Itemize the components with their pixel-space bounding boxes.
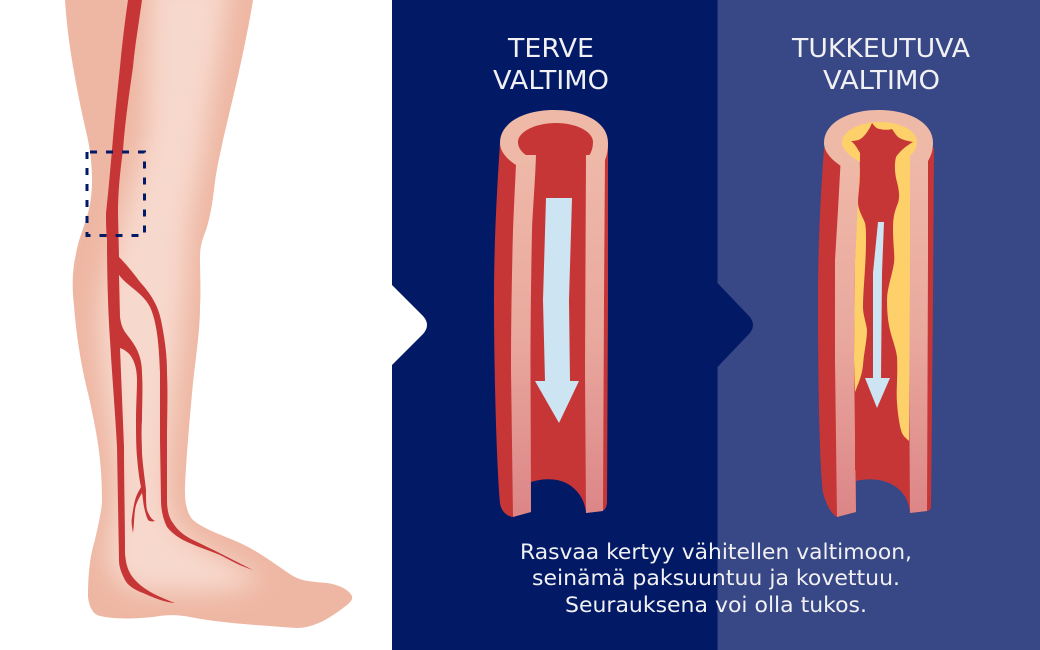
illustration: leg with arteries	[65, 0, 352, 628]
right front wall	[909, 150, 928, 513]
artery ring	[500, 110, 608, 165]
heading: healthy artery: VALTIMO	[493, 66, 609, 96]
arrow: navy chevron	[718, 283, 753, 367]
left front wall	[835, 155, 860, 517]
leg highlight	[100, 0, 262, 593]
heading: clogged artery: VALTIMO	[823, 66, 940, 96]
heading: clogged artery: TUKKEUTUVA	[791, 34, 970, 64]
flow arrow	[535, 198, 579, 423]
narrowed lumen	[851, 123, 913, 470]
illustration: clogged artery	[818, 110, 934, 517]
illustration: healthy artery	[494, 110, 608, 517]
outer artery wall	[494, 143, 608, 517]
text block: explanation	[520, 540, 912, 618]
panel: clogged artery background	[718, 0, 1040, 650]
artery network	[106, 0, 253, 603]
artery opening	[509, 118, 601, 168]
leg silhouette	[65, 0, 352, 628]
text block: explanation: Rasvaa kertyy vähitellen valtimoon,	[520, 540, 912, 565]
right front wall	[585, 155, 605, 513]
callout: dashed knee region	[87, 152, 144, 236]
panel: healthy artery background	[392, 0, 718, 650]
left front wall	[511, 155, 536, 517]
arrow: white chevron notch	[392, 285, 427, 365]
plaque	[842, 122, 917, 441]
artery ring	[824, 110, 933, 166]
heading: clogged artery	[791, 34, 970, 96]
outer artery wall	[818, 148, 934, 517]
text block: explanation: seinämä paksuuntuu ja kovettuu.	[532, 566, 900, 591]
heading: healthy artery	[493, 34, 609, 96]
heading: healthy artery: TERVE	[507, 34, 594, 64]
flow arrow	[865, 222, 890, 408]
text block: explanation: Seurauksena voi olla tukos.	[565, 593, 867, 618]
